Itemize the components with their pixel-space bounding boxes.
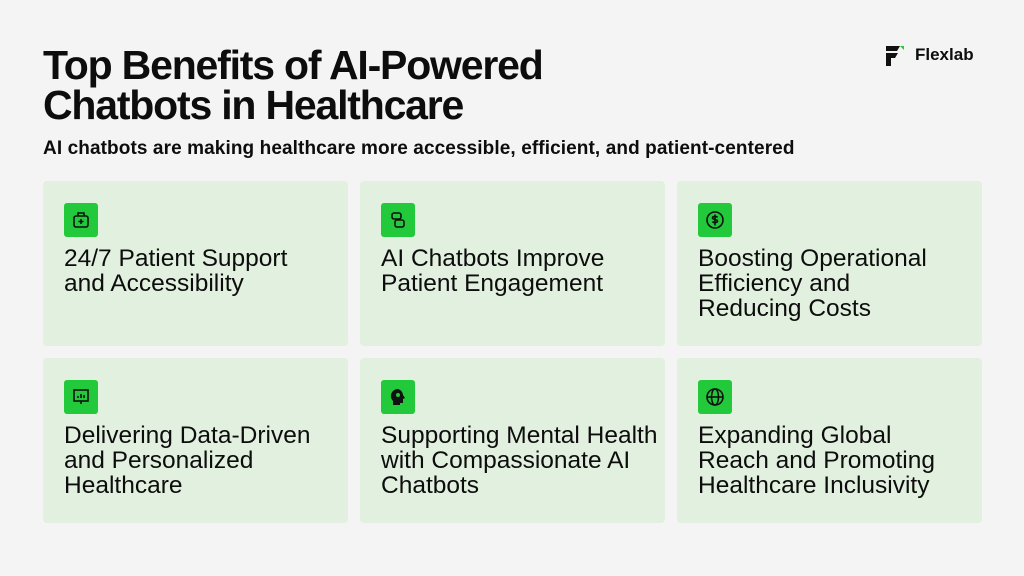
heading [381,245,604,297]
icon: chat [381,203,415,237]
heading: 24/7 Patient Support [64,245,287,272]
card 4 [43,358,348,523]
title: Top Benefits of AI-Powered [43,42,543,88]
heading: Expanding Global [698,422,891,449]
heading: Patient Engagement [381,270,603,297]
title: Chatbots in Healthcare [43,82,463,128]
heading: Boosting Operational [698,245,927,272]
card 5 [360,358,665,523]
card 1 [43,181,348,346]
heading [698,245,927,322]
heading [64,245,288,297]
title [43,42,543,128]
heading: and Accessibility [64,270,244,297]
icon: dollar [698,203,732,237]
heading: Reach and Promoting [698,447,935,474]
subtitle: AI chatbots are making healthcare more accessible, efficient, and patient-centered [43,138,795,159]
heading [698,422,935,499]
heading: with Compassionate AI [381,447,630,474]
icon: chart [64,380,98,414]
heading: Supporting Mental Health [381,422,657,449]
card 2 [360,181,665,346]
heading: Reducing Costs [698,295,871,322]
heading: Healthcare [64,472,182,499]
logo [886,45,974,66]
logo: Flexlab [915,45,974,64]
heading [64,422,310,499]
heading: Chatbots [381,472,479,499]
card 6 [677,358,982,523]
icon: medical kit [64,203,98,237]
heading: Delivering Data-Driven [64,422,310,449]
heading: Efficiency and [698,270,850,297]
heading: AI Chatbots Improve [381,245,604,272]
heading: and Personalized [64,447,253,474]
heading: Healthcare Inclusivity [698,472,929,499]
icon: globe [698,380,732,414]
heading [381,422,657,499]
icon: head [381,380,415,414]
card 3 [677,181,982,346]
